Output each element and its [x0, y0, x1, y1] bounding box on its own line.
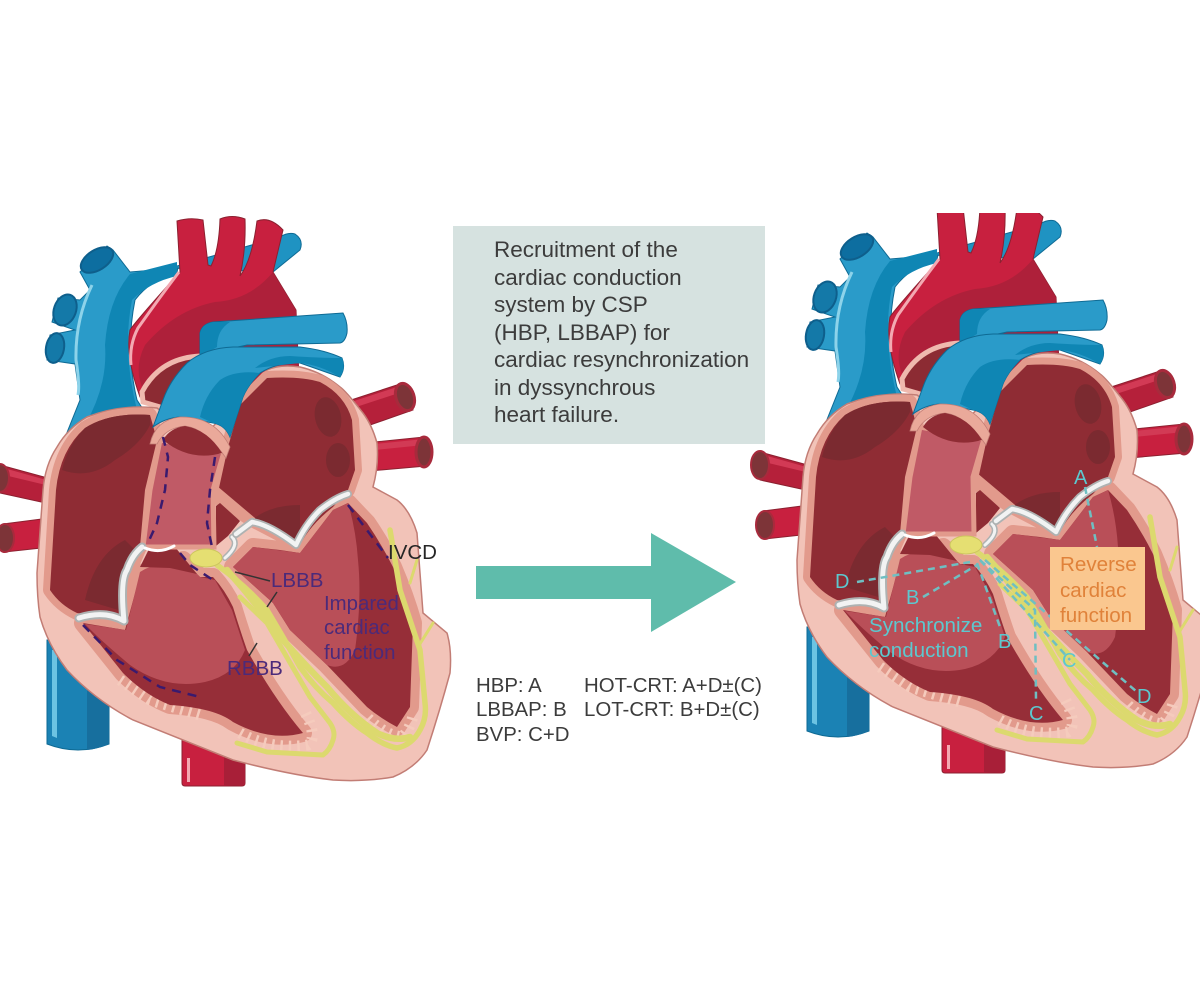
left ventricle	[233, 503, 413, 727]
description panel: heart failure.	[494, 402, 619, 427]
callout: reverse cardiac function: function	[1060, 604, 1132, 627]
right heart: resynchronized anatomy	[751, 204, 1200, 773]
label: impaired cardiac function: function	[324, 642, 395, 664]
legend of pacing modes: HBP: A	[476, 675, 542, 697]
aortic root collar	[150, 417, 230, 458]
lead labels A to D: D	[835, 571, 849, 593]
AV node	[190, 549, 222, 567]
left atrium chamber	[216, 378, 355, 546]
pulmonary artery back branch	[170, 233, 301, 272]
label: LBBB: LBBB	[271, 569, 323, 592]
conduction block dashed lines	[83, 437, 388, 697]
conduction system	[217, 530, 433, 755]
pacing lead dashed lines	[857, 487, 1137, 700]
lead labels A to D: B	[906, 587, 919, 609]
label: impaired cardiac function: Impared	[324, 593, 399, 615]
descending aorta	[182, 740, 245, 786]
legend of pacing modes: LBBAP: B	[476, 699, 567, 721]
lead labels A to D: A	[1074, 467, 1088, 489]
lead labels A to D	[835, 467, 1151, 725]
vessels: side pulmonary veins	[0, 381, 432, 552]
aorta arch	[129, 216, 300, 420]
lead labels A to D: B	[998, 631, 1011, 653]
description panel	[453, 226, 765, 444]
heart wall outer body	[37, 366, 451, 781]
right ventricle	[83, 547, 303, 736]
vena cava inferior	[47, 640, 109, 750]
label: IVCD: IVCD	[388, 541, 437, 564]
label: RBBB: RBBB	[227, 657, 283, 680]
callout: reverse cardiac function: Reverse	[1060, 553, 1137, 576]
chamber muscle lining	[50, 378, 413, 736]
arrow	[476, 533, 736, 632]
trabeculae stripes	[120, 680, 414, 746]
label: impaired cardiac function: cardiac	[324, 617, 390, 639]
description panel: cardiac conduction	[494, 265, 682, 290]
left heart annotations	[83, 437, 437, 697]
legend of pacing modes: LOT-CRT: B+D±(C)	[584, 699, 760, 721]
label: synchronize conduction: Synchronize	[869, 614, 982, 637]
description panel: system by CSP	[494, 292, 647, 317]
superior vena cava and pulmonary veins	[44, 242, 178, 445]
pulmonary artery front branches	[153, 313, 347, 437]
description panel: cardiac resynchronization	[494, 347, 749, 372]
leader lines	[235, 572, 277, 656]
legend of pacing modes: BVP: C+D	[476, 724, 570, 746]
left heart: dyssynchronous anatomy	[0, 216, 451, 786]
legend of pacing modes: HOT-CRT: A+D±(C)	[584, 675, 762, 697]
aortic root	[143, 440, 252, 547]
lead labels A to D: D	[1137, 686, 1151, 708]
valves	[79, 494, 348, 621]
callout: reverse cardiac function	[1050, 547, 1145, 630]
right heart annotations	[835, 467, 1151, 725]
label: synchronize conduction: conduction	[869, 639, 969, 662]
lead labels A to D: C	[1062, 650, 1076, 672]
right atrium chamber	[50, 415, 157, 620]
lead labels A to D: C	[1029, 703, 1043, 725]
description panel: (HBP, LBBAP) for	[494, 320, 670, 345]
description panel: Recruitment of the	[494, 237, 678, 262]
description panel: in dyssynchrous	[494, 375, 655, 400]
callout: reverse cardiac function: cardiac	[1060, 579, 1126, 602]
